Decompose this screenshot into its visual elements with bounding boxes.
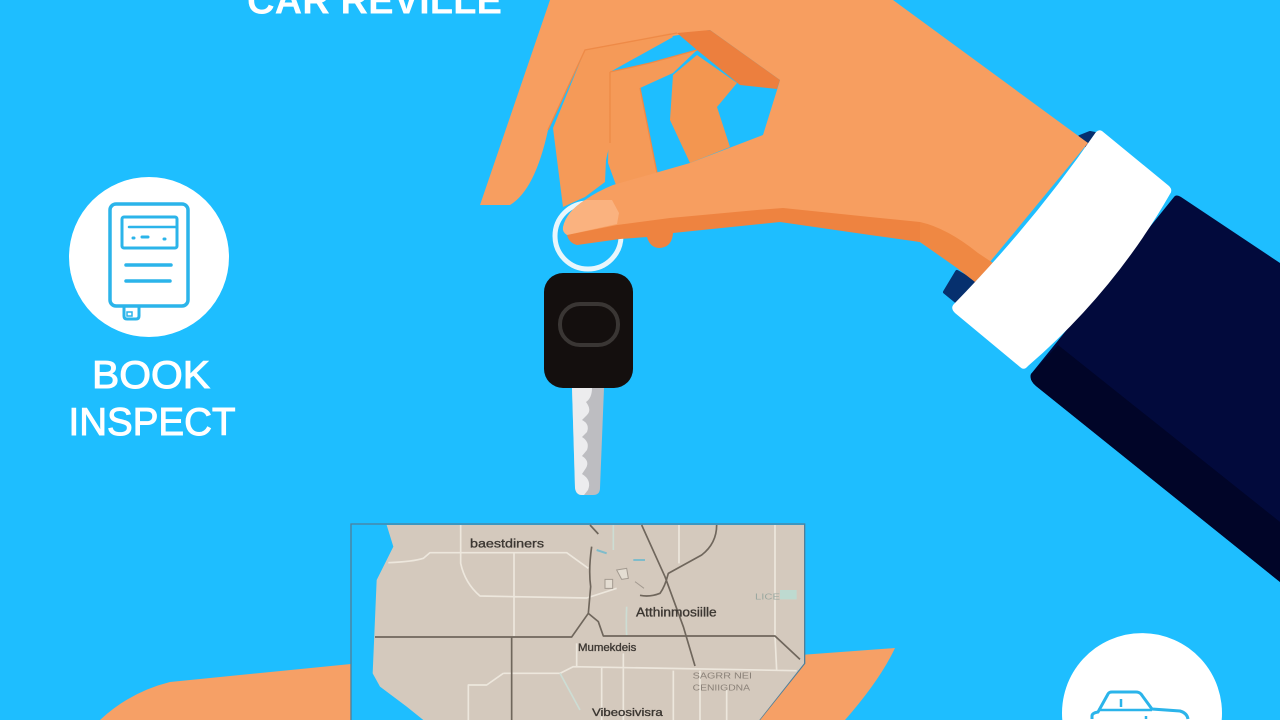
faint map labels: SAGRR NEI: [693, 671, 752, 681]
faint map labels: CENIIGDNA: [693, 683, 750, 693]
key blade: [572, 388, 604, 495]
finger one: [553, 33, 673, 207]
label: book inspect: [68, 354, 236, 444]
map city detail: [597, 550, 797, 599]
faint map labels: [693, 592, 780, 693]
key fob: [544, 273, 633, 388]
knuckle shadow: [677, 30, 780, 89]
map labels: Vibeosivisra: [592, 707, 664, 719]
map labels: baestdiners: [470, 537, 544, 551]
key ring: [555, 203, 621, 269]
finger two: [608, 50, 697, 185]
thumb underside shadow: [567, 208, 920, 248]
map labels: Atthinmosiille: [636, 606, 717, 620]
thumb: [563, 100, 920, 245]
key: [544, 203, 633, 495]
lower hand holding map: [100, 648, 895, 720]
label: book inspect: INSPECT: [68, 401, 236, 444]
shirt cuff: [952, 130, 1171, 369]
back of hand and index finger: [480, 0, 1088, 280]
icon: inspection booklet: [69, 177, 229, 337]
sleeve: [1031, 196, 1280, 582]
map top edge: [351, 524, 805, 720]
map labels: Mumekdeis: [578, 642, 637, 654]
map roads: [375, 525, 800, 720]
faint map labels: LICE: [755, 592, 780, 601]
icon: car badge: [1062, 633, 1222, 720]
map labels: [470, 537, 717, 719]
fob button: [560, 304, 618, 345]
shirt underlayer: [945, 133, 1100, 301]
label: book inspect: BOOK: [92, 354, 210, 397]
giving hand: [480, 0, 1088, 282]
map land: [373, 525, 804, 720]
thumb nail: [563, 200, 619, 235]
map: [351, 524, 805, 720]
map water panel: [351, 524, 805, 720]
wrist shadow: [920, 222, 993, 282]
finger three: [670, 55, 737, 163]
finger creases: [548, 33, 697, 173]
